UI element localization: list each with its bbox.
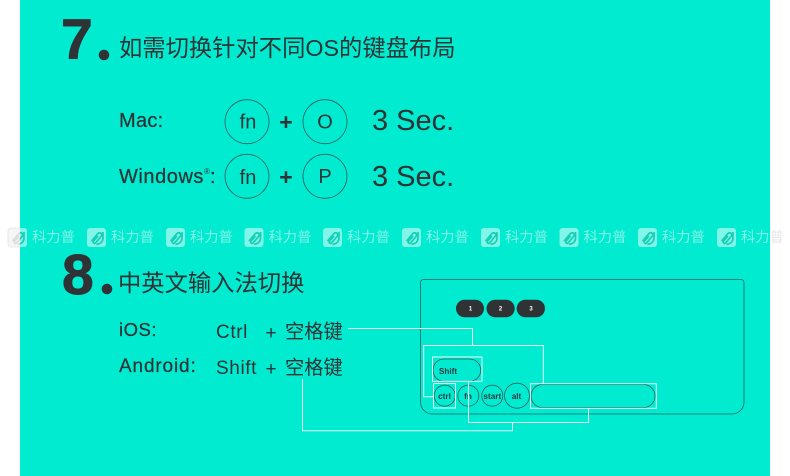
panel: Mac shortcut: + bbox=[279, 109, 293, 135]
panel: Mac shortcut: fn bbox=[240, 112, 256, 134]
watermark row: 科力普 bbox=[584, 226, 626, 247]
bottom row keys: alt bbox=[512, 392, 522, 401]
shift key bbox=[433, 359, 481, 381]
watermark row: 科力普 bbox=[111, 226, 154, 247]
bottom row keys: start bbox=[483, 392, 501, 401]
text block: Android shortcut: + bbox=[265, 359, 277, 380]
watermark row: 科力普 bbox=[32, 226, 75, 247]
step 8 heading: 中英文输入法切换 bbox=[118, 270, 304, 296]
watermark row: 科力普 bbox=[741, 226, 784, 247]
panel: Windows shortcut: 3 Sec. bbox=[372, 161, 454, 193]
panel: Mac shortcut: 3 Sec. bbox=[372, 105, 454, 137]
panel: Windows shortcut: fn bbox=[240, 167, 256, 189]
panel: Windows shortcut: P bbox=[318, 166, 332, 188]
step 7 heading: 如需切换针对不同OS的键盘布局 bbox=[119, 35, 456, 61]
panel: Windows shortcut bbox=[119, 154, 454, 198]
text block: iOS shortcut: Ctrl bbox=[216, 322, 248, 343]
text block: Android shortcut bbox=[119, 356, 343, 380]
panel: Windows shortcut: Windows bbox=[119, 166, 204, 188]
panel: Windows shortcut: ® bbox=[204, 167, 210, 176]
text block: iOS shortcut: + bbox=[265, 323, 277, 344]
watermark row: 科力普 bbox=[741, 226, 784, 247]
text block: Android shortcut: Android: bbox=[119, 356, 197, 377]
device keys 1 2 3 bbox=[456, 300, 545, 317]
watermark row bbox=[8, 226, 784, 247]
device keys 1 2 3: 3 bbox=[529, 306, 533, 312]
text block: Android shortcut: 空格键 bbox=[285, 357, 343, 379]
bottom row keys: fn bbox=[464, 392, 472, 401]
text block: iOS shortcut bbox=[119, 319, 343, 344]
callout connector lines bbox=[302, 328, 656, 431]
device keys 1 2 3: 1 bbox=[469, 306, 473, 312]
step 8 heading: 8 bbox=[62, 243, 94, 307]
panel: Mac shortcut: O bbox=[317, 112, 333, 134]
keyboard diagram bbox=[302, 280, 744, 431]
watermark row: 科力普 bbox=[347, 226, 390, 247]
watermark row: 科力普 bbox=[268, 226, 311, 247]
shift key: Shift bbox=[439, 367, 457, 376]
panel: Windows shortcut: + bbox=[279, 164, 293, 190]
bottom row keys bbox=[434, 383, 655, 408]
device keys 1 2 3: 2 bbox=[499, 306, 503, 312]
step 8 heading bbox=[62, 243, 304, 307]
bottom row keys: ctrl bbox=[438, 392, 451, 401]
panel: Windows shortcut: : bbox=[210, 166, 216, 188]
watermark row: 科力普 bbox=[505, 226, 548, 247]
watermark row: 科力普 bbox=[190, 226, 233, 247]
text block: Android shortcut: Shift bbox=[216, 358, 257, 379]
panel: Mac shortcut bbox=[119, 100, 454, 144]
keyboard outline bbox=[420, 280, 744, 414]
watermark row: 科力普 bbox=[662, 226, 705, 247]
panel: Mac shortcut: Mac: bbox=[119, 110, 164, 132]
watermark row: 科力普 bbox=[426, 226, 469, 247]
text block: iOS shortcut: 空格键 bbox=[285, 321, 343, 343]
text block: iOS shortcut: iOS: bbox=[119, 319, 157, 340]
step 7 heading bbox=[61, 8, 456, 72]
step 7 heading: 7 bbox=[61, 8, 93, 72]
